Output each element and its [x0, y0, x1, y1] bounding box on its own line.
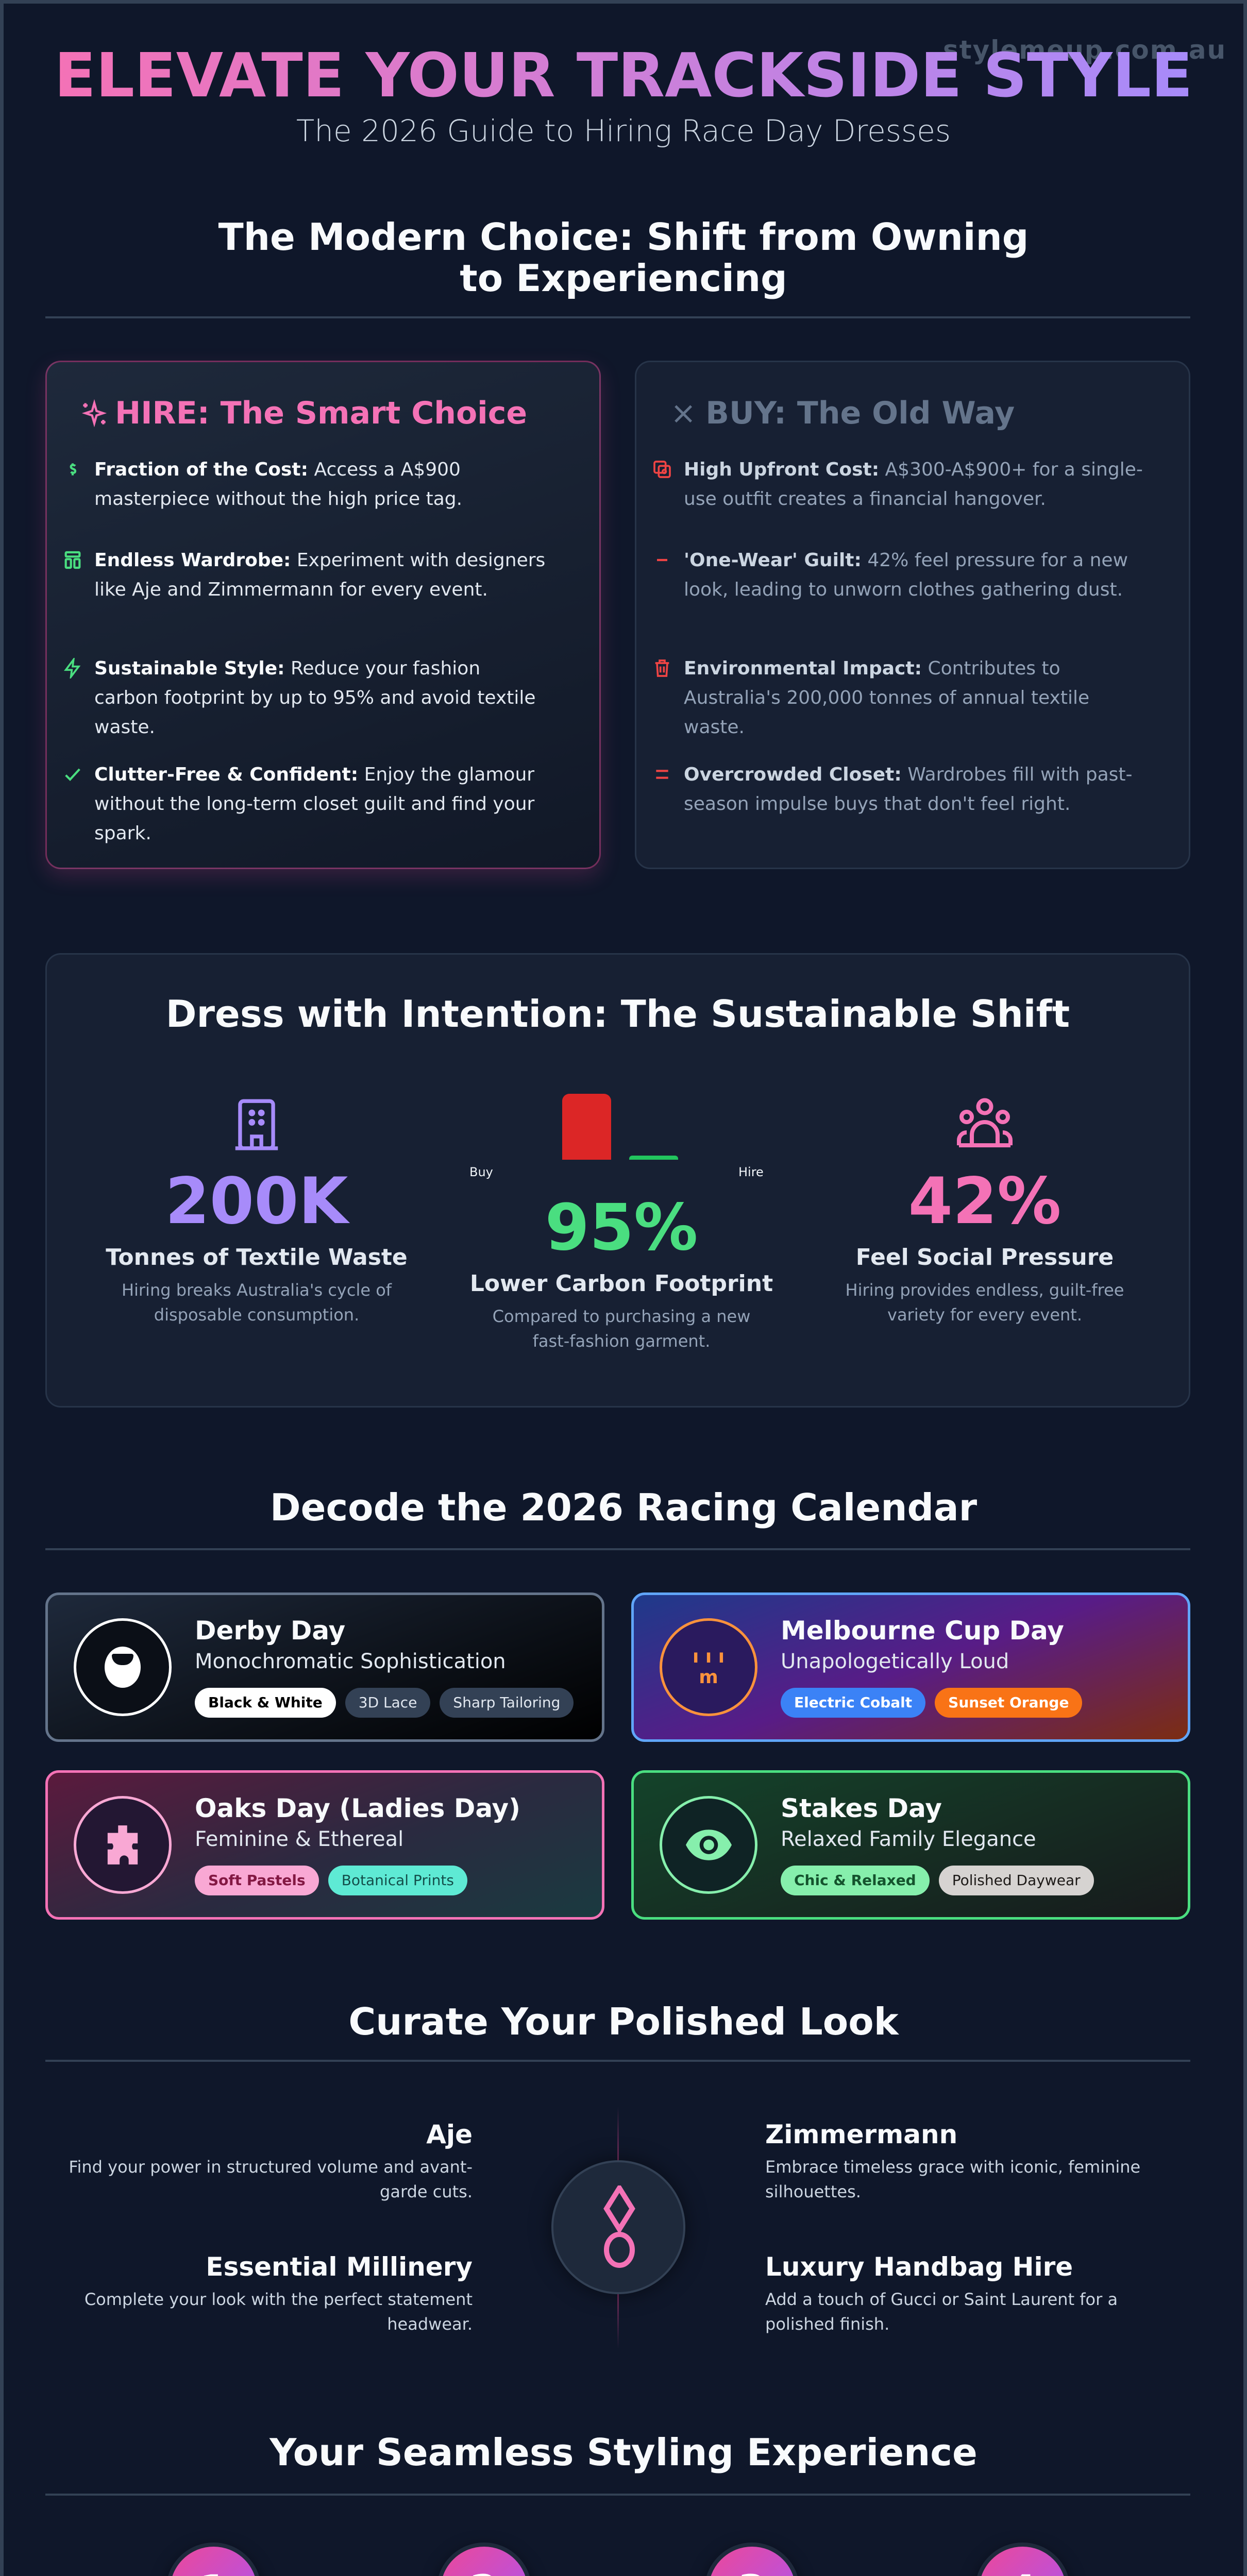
- icon: building: [235, 1099, 278, 1150]
- card: derby day: [45, 1592, 604, 1742]
- chart: buy vs hire: Hire: [738, 1165, 764, 1179]
- card: derby day: 3D Lace: [359, 1694, 417, 1711]
- card: oaks day: Feminine & Ethereal: [195, 1827, 403, 1851]
- card: derby day: Derby Day: [195, 1616, 345, 1646]
- stat: 42%: Hiring provides endless, guilt-free variety for every event.: [846, 1280, 1124, 1325]
- stat: 95%: [470, 1191, 773, 1351]
- heading: modern choice: The Modern Choice: Shift from Owning to Experiencing: [218, 215, 1029, 300]
- look: handbag: Luxury Handbag Hire: [765, 2252, 1073, 2282]
- icon: melbourne: m: [699, 1667, 718, 1688]
- card: oaks day: Soft Pastels: [208, 1872, 306, 1889]
- item: upfront cost: High Upfront Cost: A$300-A$900+ for a single-use outfit creates a financial hangover.: [684, 459, 1143, 510]
- item: wardrobe: Endless Wardrobe: Experiment with designers like Aje and Zimmermann for every event.: [94, 550, 545, 600]
- card: derby day: Monochromatic Sophistication: [195, 1650, 506, 1673]
- icon: derby: [74, 1618, 172, 1716]
- icon: accessories: [551, 2160, 685, 2294]
- stat: 200K: Tonnes of Textile Waste: [106, 1244, 408, 1270]
- heading: buy: × BUY: The Old Way: [670, 395, 1015, 431]
- stat: 95%: 95%: [545, 1191, 698, 1265]
- item: guilt: 'One-Wear' Guilt: 42% feel pressure for a new look, leading to unworn clothes gathering dust.: [684, 550, 1128, 600]
- heading: curate: Curate Your Polished Look: [348, 2000, 899, 2043]
- stat: 42%: [846, 1098, 1124, 1325]
- panel: hire: [45, 361, 601, 869]
- card: derby day: Sharp Tailoring: [453, 1694, 560, 1711]
- heading: calendar: Decode the 2026 Racing Calendar: [270, 1486, 977, 1529]
- card: oaks day: Oaks Day (Ladies Day): [195, 1793, 520, 1823]
- stat: 42%: Feel Social Pressure: [856, 1244, 1114, 1270]
- icon: melbourne: [660, 1618, 757, 1716]
- icon: melbourne: ı ı ı: [693, 1646, 724, 1667]
- card: stakes day: Stakes Day: [781, 1793, 942, 1823]
- card: melbourne cup: Unapologetically Loud: [781, 1650, 1009, 1673]
- icon: oaks: [74, 1796, 172, 1894]
- card: oaks day: Botanical Prints: [342, 1872, 454, 1889]
- look: zimmermann: [765, 2120, 1140, 2201]
- icon: people: [957, 1098, 1013, 1147]
- panel: buy: [635, 361, 1190, 869]
- card: melbourne cup: Melbourne Cup Day: [781, 1616, 1064, 1646]
- item: environmental: Environmental Impact: Contributes to Australia's 200,000 tonnes of annual textile waste.: [684, 658, 1089, 738]
- stat: 200K: 200K: [165, 1164, 348, 1239]
- heading: hire: HIRE: The Smart Choice: [115, 395, 527, 431]
- stat: 95%: Lower Carbon Footprint: [470, 1270, 773, 1297]
- look: millinery: Complete your look with the perfect statement headwear.: [85, 2290, 473, 2334]
- look: aje: Find your power in structured volume and avant-garde cuts.: [69, 2157, 473, 2201]
- card: stakes day: Chic & Relaxed: [794, 1872, 916, 1889]
- look: zimmermann: Embrace timeless grace with iconic, feminine silhouettes.: [765, 2157, 1140, 2201]
- item: clutter-free: Clutter-Free & Confident: Enjoy the glamour without the long-term closet guilt and find your spark.: [94, 764, 534, 844]
- center line: [617, 2107, 619, 2349]
- watermark: stylemeup.com.au: [943, 35, 1226, 65]
- chart: buy vs hire: [469, 1094, 764, 1179]
- card: melbourne cup: Electric Cobalt: [794, 1694, 912, 1711]
- card: stakes day: Relaxed Family Elegance: [781, 1827, 1036, 1851]
- card: melbourne cup: [631, 1592, 1190, 1742]
- look: millinery: [85, 2252, 473, 2334]
- icon: stakes: [660, 1796, 757, 1894]
- card: stakes day: [631, 1770, 1190, 1920]
- chart: buy vs hire: Buy: [469, 1165, 493, 1179]
- item: cost: Fraction of the Cost: Access a A$900 masterpiece without the high price tag.: [94, 459, 462, 510]
- heading: steps: Your Seamless Styling Experience: [269, 2431, 978, 2474]
- card: oaks day: [45, 1770, 604, 1920]
- look: millinery: Essential Millinery: [206, 2252, 473, 2282]
- item: sustainable: Sustainable Style: Reduce your fashion carbon footprint by up to 95% and avoid textile waste.: [94, 658, 535, 738]
- stat: 200K: [106, 1099, 408, 1325]
- look: handbag: [765, 2252, 1118, 2334]
- stat: 200K: Hiring breaks Australia's cycle of disposable consumption.: [122, 1280, 392, 1325]
- look: handbag: Add a touch of Gucci or Saint Laurent for a polished finish.: [765, 2290, 1118, 2334]
- look: aje: Aje: [426, 2120, 473, 2149]
- subtitle: The 2026 Guide to Hiring Race Day Dresses: [296, 113, 951, 148]
- card: derby day: Black & White: [208, 1694, 323, 1711]
- item: closet: Overcrowded Closet: Wardrobes fill with past-season impulse buys that don't feel right.: [684, 764, 1133, 815]
- card: melbourne cup: Sunset Orange: [948, 1694, 1069, 1711]
- heading: sustainable: Dress with Intention: The Sustainable Shift: [166, 992, 1070, 1036]
- look: aje: [69, 2120, 473, 2201]
- look: zimmermann: Zimmermann: [765, 2120, 957, 2149]
- panel: sustainable shift: [45, 953, 1190, 1408]
- title: ELEVATE YOUR TRACKSIDE STYLE: [54, 40, 1193, 111]
- card: stakes day: Polished Daywear: [952, 1872, 1081, 1889]
- stat: 95%: Compared to purchasing a new fast-fashion garment.: [493, 1307, 750, 1351]
- stat: 42%: 42%: [908, 1164, 1061, 1239]
